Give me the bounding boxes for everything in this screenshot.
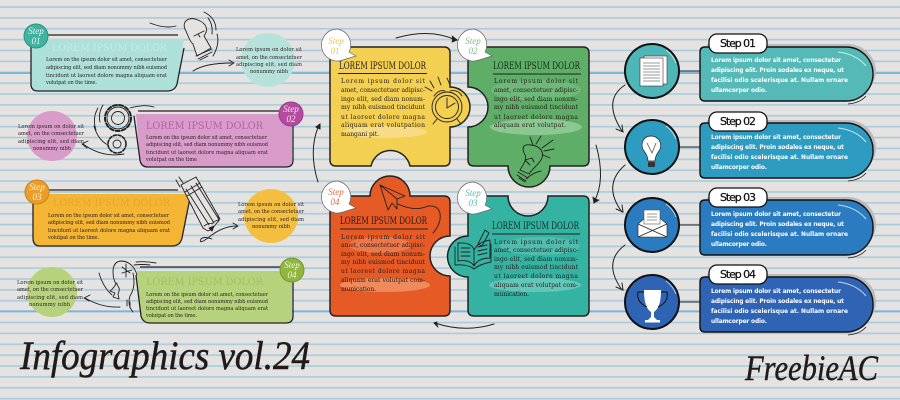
pill: step 01	[700, 44, 876, 104]
badge: puzzle 04: Step	[328, 187, 344, 197]
pill: step 04: facilisi odio scelerisque at. Nullam ornare	[711, 309, 848, 315]
text block: puzzle 02: my nibh euismod tincidunt	[494, 104, 579, 111]
text block: puzzle 03: munication.	[494, 291, 529, 298]
badge: step 01: Step	[28, 26, 44, 36]
step label: 01	[709, 34, 767, 53]
badge: step 02: Step	[283, 104, 299, 114]
text block: step 01: adipiscing elit, sed diam nonummy nibh euismod	[46, 65, 168, 71]
arrow: step 03 to 04	[434, 322, 494, 328]
circle note: step 02: Lorem ipsum on dolor sit	[18, 124, 84, 130]
step label: 01: Step 01	[720, 37, 756, 50]
text block: puzzle 04: ut laoreet dolore magna	[341, 268, 425, 275]
badge: step 02: 02	[286, 114, 296, 124]
circle note: step 01: adipiscing elit, sed diam	[236, 62, 302, 68]
title: Infographics vol.24	[19, 333, 310, 378]
badge: step 04: 04	[288, 270, 297, 280]
badge: puzzle 03: 03	[468, 198, 478, 208]
circle note: step 01: amet, on the consectetuer	[236, 55, 303, 61]
text block: step 03: Lorem on the ipsum dolor sit amet, consectetuer	[48, 213, 170, 219]
text block: step 01	[45, 57, 168, 86]
puzzle piece: step 04 orange	[321, 176, 450, 316]
heading: puzzle 02: LOREM IPSUM DOLOR	[493, 61, 580, 72]
text block: puzzle 04: my nibh euismod tincidunt	[341, 259, 426, 266]
text block: puzzle 01: ingo elit, sed diam nonum-	[341, 96, 425, 103]
circle note: step 01: Lorem ipsum on dolor sit	[236, 47, 302, 53]
text block: step 02	[145, 135, 269, 163]
text block: puzzle 02: ingo elit, sed diam nonum-	[494, 96, 578, 103]
circle note: step 04: amet, on the consectetuer	[17, 287, 84, 293]
panel: step 03 orange	[25, 180, 190, 246]
text block: step 04: Lorem on the ipsum dolor sit amet, consectetuer	[146, 292, 269, 298]
badge: puzzle 03: Step	[465, 188, 481, 198]
text block: puzzle 03: ingo elit, sed diam nonum-	[494, 256, 578, 263]
text block: step 04: adipiscing elit, sed diam nonummy nibh euismod	[146, 299, 269, 305]
text block: step 03	[47, 213, 171, 241]
text block: step 01: tincidunt ut laoreet dolore magna aliquam erat	[46, 73, 167, 79]
heading: step 04: LOREM IPSUM DOLOR	[146, 277, 263, 288]
highlight: puzzle 04	[340, 278, 430, 292]
pill: step 04: Lorem ipsum dolor sit amet, consectetur	[711, 289, 841, 295]
badge: step 01	[24, 24, 48, 48]
badge: puzzle 04	[321, 181, 356, 213]
pill: step 04: adipiscing elit. Proin sodales ex neque, ut	[711, 299, 844, 305]
highlight: puzzle 02	[490, 119, 582, 135]
badge: puzzle 02: 02	[468, 46, 478, 56]
left column: step panels	[17, 12, 305, 323]
icon: gears sketch	[82, 105, 154, 155]
text block: puzzle 04: aliquam erat volutpat com-	[341, 277, 425, 284]
heading: puzzle 01: LOREM IPSUM DOLOR	[339, 61, 426, 72]
text block: step 04: volutpat on the time.	[145, 313, 197, 319]
circle note: step 02: amet, on the consectetuer	[18, 131, 85, 137]
text block: puzzle 01: aliquam erat volutpation	[341, 122, 425, 129]
heading: step 03: LOREM IPSUM DOLOR	[53, 198, 170, 209]
icon: idea bulb	[517, 136, 554, 182]
circle note: step 01	[236, 33, 303, 87]
badge: puzzle 02	[457, 29, 492, 61]
circle icon: light bulb	[625, 120, 679, 174]
badge: puzzle 02: Step	[465, 36, 481, 46]
text block: puzzle 01: amet, consectetuer adipisc-	[341, 87, 425, 94]
badge: step 03	[25, 180, 49, 204]
icon: open book	[455, 230, 491, 269]
circle icon: document	[625, 44, 679, 98]
pill: step 03: facilisi odio scelerisque at. Nullam ornare	[711, 232, 848, 238]
text block: puzzle 03: ut laoreet dolore magna	[494, 273, 578, 280]
text block: puzzle 04: amet, consectetuer adipisc-	[341, 242, 425, 249]
circle note: step 04: nonummy nibh	[29, 302, 71, 308]
badge: puzzle 01	[321, 29, 356, 61]
circle note: step 03	[238, 189, 305, 243]
text block: step 03: tincidunt ut laoreet dolore magna aliquam erat	[48, 228, 170, 234]
text block: step 03: adipiscing elit, sed diam nonummy nibh euismod	[48, 220, 171, 226]
text block: puzzle 01: my nibh euismod tincidunt	[341, 104, 426, 111]
circle icon: trophy	[625, 275, 679, 329]
circle note: step 03: Lorem ipsum on dolor sit	[238, 202, 304, 208]
pill: step 03: adipiscing elit. Proin sodales ex neque, ut	[711, 222, 844, 228]
text block: step 02: adipiscing elit, sed diam nonummy nibh euismod	[146, 142, 269, 148]
step row 01	[625, 34, 876, 104]
panel: step 02 pink	[134, 102, 303, 167]
pill: step 01: adipiscing elit. Proin sodales ex neque, ut	[711, 68, 844, 74]
pill: step 03: Lorem ipsum dolor sit amet, consectetur	[711, 212, 841, 218]
arrow: step 01 to 02	[396, 33, 457, 42]
center: puzzle cycle	[313, 29, 601, 328]
text block: puzzle 02	[494, 78, 579, 129]
badge: step 02	[279, 102, 303, 126]
puzzle piece: step 03 teal	[447, 182, 589, 316]
brand name: FreebieAC	[744, 348, 879, 388]
circle note: step 02: nonummy nibh	[33, 146, 72, 152]
text block: step 02: Lorem on the ipsum dolor sit amet, consectetuer	[146, 135, 268, 141]
circle note: step 02	[18, 111, 85, 161]
text block: step 03: volutpat on the time.	[47, 235, 99, 241]
pill: step 01: facilisi odio scelerisque at. Nullam ornare	[711, 78, 848, 84]
pill: step 02: adipiscing elit. Proin sodales ex neque, ut	[711, 145, 844, 151]
circle note: step 03: amet, on the consectetuer	[238, 209, 305, 215]
text block: puzzle 04: munication.	[341, 286, 376, 293]
icon: head sketch	[84, 261, 156, 312]
text block: puzzle 03: Lorem ipsum dolor sit	[494, 239, 579, 246]
step label: 02: Step 02	[720, 115, 756, 128]
icon: light bulb sketch	[150, 12, 234, 71]
pill: step 02	[700, 120, 876, 181]
circle note: step 04	[17, 267, 84, 317]
heading: step 01: LOREM IPSUM DOLOR	[52, 43, 167, 54]
pill: step 03: ullamcorper odio.	[711, 242, 767, 248]
step label: 02	[709, 112, 767, 131]
icon: pencil sketch	[176, 177, 238, 242]
text block: puzzle 01	[341, 78, 426, 138]
circle note: step 04: Lorem ipsum on dolor sit	[17, 280, 83, 286]
badge: puzzle 04: 04	[330, 197, 340, 207]
pill: step 04: ullamcorper odio.	[711, 319, 767, 325]
text block: puzzle 03: my nibh euismod tincidunt	[494, 264, 579, 271]
badge: step 04	[280, 258, 304, 282]
icon: alarm clock	[425, 77, 462, 124]
arrow: step 04 to 01	[313, 124, 320, 182]
arrow: step 02 to 03	[593, 145, 601, 203]
step label: 04	[709, 265, 767, 284]
panel: step 01 teal	[24, 24, 184, 91]
text block: puzzle 03: amet, consectetuer adipisc-	[494, 247, 578, 254]
step row 04	[625, 265, 876, 335]
puzzle piece: step 01 yellow	[321, 29, 470, 166]
pill: step 02: ullamcorper odio.	[711, 165, 767, 171]
circle note: step 03: adipiscing elit, sed diam	[238, 217, 304, 223]
circle note: step 04: adipiscing elit, sed diam	[17, 295, 83, 301]
highlight: puzzle 03	[489, 278, 581, 292]
text block: puzzle 02: aliquam erat volutpat.	[494, 122, 566, 129]
pill: step 02: facilisi odio scelerisque at. Nullam ornare	[711, 155, 848, 161]
text block: step 01: Lorem on the ipsum dolor sit amet, consectetuer	[46, 57, 168, 63]
icon: paper plane	[380, 185, 440, 233]
text block: step 01: volutpat on the time.	[45, 80, 97, 86]
badge: puzzle 01: 01	[330, 46, 340, 56]
panel: step 04 green	[136, 258, 304, 323]
pill: step 03	[700, 197, 876, 258]
text block: puzzle 04	[341, 234, 426, 293]
text block: puzzle 03	[494, 239, 579, 298]
text block: puzzle 01: mangani pit.	[341, 131, 379, 138]
text block: step 04	[145, 292, 269, 319]
badge: step 03: 03	[32, 192, 42, 202]
heading: puzzle 03: LOREM IPSUM DOLOR	[492, 221, 579, 232]
step row 03	[625, 188, 876, 258]
text block: step 04: tincidunt ut laoreet dolore magna aliquam erat	[146, 306, 268, 312]
highlight: puzzle 01	[343, 126, 427, 138]
heading: puzzle 04: LOREM IPSUM DOLOR	[340, 216, 427, 227]
text block: puzzle 02: Lorem ipsum dolor sit	[494, 78, 579, 85]
pill: step 02: Lorem ipsum dolor sit amet, consectetur	[711, 135, 841, 141]
pill: step 01: ullamcorper odio.	[711, 88, 767, 94]
text block: puzzle 03: aliquam erat volutpat com-	[494, 282, 578, 289]
badge: puzzle 01: Step	[328, 36, 344, 46]
text block: step 02: volutpat on the time	[145, 157, 197, 163]
pill: step 01: Lorem ipsum dolor sit amet, consectetur	[711, 58, 841, 64]
badge: step 03: Step	[29, 182, 45, 192]
circle icon: envelope	[625, 198, 679, 252]
text block: puzzle 01: ut laoreet dolore magna	[341, 114, 425, 121]
text block: puzzle 02: ut laoreet dolore magna	[494, 114, 578, 121]
text block: puzzle 02: amet, consectetuer adipisc-	[494, 87, 578, 94]
pill: step 04	[700, 274, 876, 335]
step label: 03: Step 03	[720, 191, 756, 204]
right column: step list	[613, 34, 876, 335]
badge: puzzle 03	[457, 182, 492, 214]
step label: 03	[709, 188, 767, 207]
puzzle piece: step 02 green	[457, 29, 589, 187]
connector arrows between circles	[613, 85, 625, 290]
circle note: step 03: nonummy nibh	[252, 224, 291, 230]
text block: step 02: tincidunt ut laoreet dolore magna aliquam erat	[146, 150, 268, 156]
text block: puzzle 01: Lorem ipsum dolor sit	[341, 78, 426, 85]
circle note: step 02: adipiscing elit, sed diam	[18, 139, 84, 145]
step row 02	[625, 112, 876, 181]
step label: 04: Step 04	[720, 268, 756, 281]
circle note: step 01: nonummy nibh	[250, 69, 289, 75]
text block: puzzle 04: Lorem ipsum dolor sit	[341, 234, 426, 241]
heading: step 02: LOREM IPSUM DOLOR	[146, 121, 263, 132]
text block: puzzle 04: ingo elit, sed diam nonum-	[341, 251, 425, 258]
badge: step 01: 01	[32, 36, 40, 46]
badge: step 04: Step	[284, 260, 300, 270]
